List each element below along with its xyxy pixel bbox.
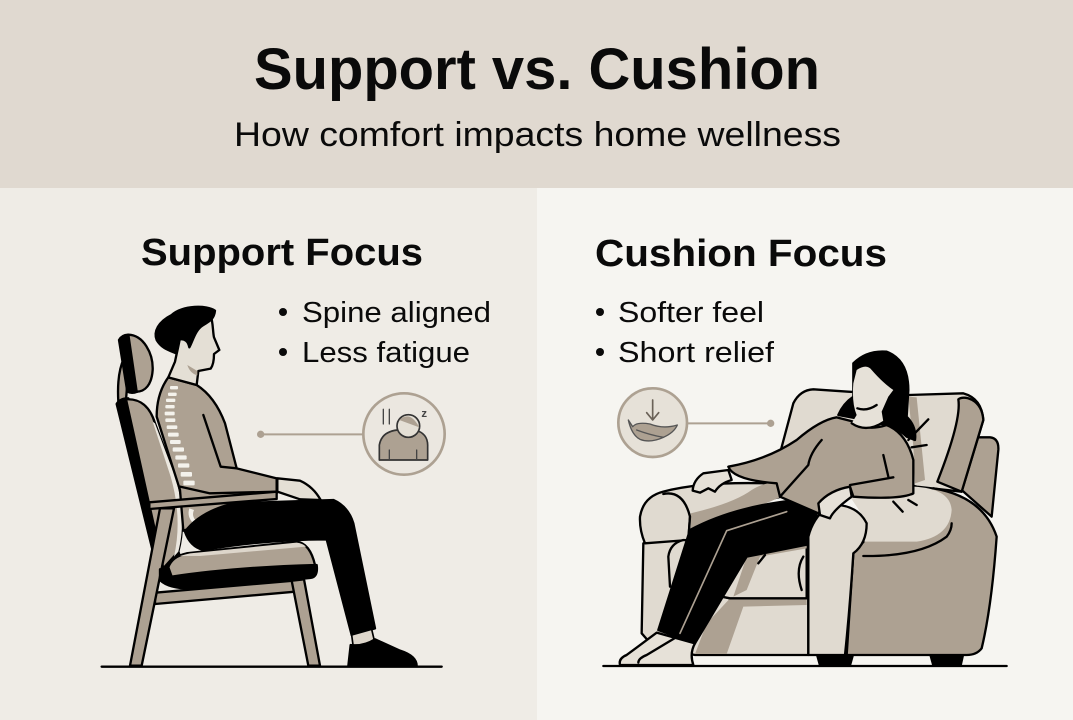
illustration: man seated in supportive chair — [102, 307, 445, 667]
armchair rear wing — [960, 437, 998, 517]
hand — [277, 478, 321, 500]
armrest — [149, 492, 277, 509]
leg — [185, 500, 375, 635]
torso — [157, 377, 277, 531]
floor line — [603, 662, 1007, 669]
heading: cushion focus: Cushion Focus — [595, 233, 887, 275]
heading: support focus: Support Focus — [141, 232, 423, 274]
list: support benefits: Spine aligned — [302, 297, 491, 329]
front armrest — [808, 505, 867, 655]
chair seat — [160, 542, 317, 589]
list: support benefits — [279, 297, 491, 369]
spine — [165, 386, 196, 523]
arm detail — [180, 415, 277, 493]
illustration: woman relaxing in soft armchair — [603, 351, 1007, 666]
list: cushion effects — [596, 297, 775, 369]
head — [156, 307, 219, 385]
connector — [687, 420, 774, 426]
hair — [838, 351, 915, 440]
armchair body — [847, 488, 997, 655]
icon: feather — [618, 388, 687, 457]
icon: tired person — [363, 393, 445, 475]
list: support benefits: Less fatigue — [302, 337, 470, 369]
title: Support vs. Cushion — [254, 37, 820, 102]
torso — [728, 417, 913, 513]
foot — [348, 629, 417, 666]
icon: tired person: z — [421, 408, 427, 420]
hands — [693, 470, 852, 518]
armchair backrest — [780, 389, 983, 492]
feet — [620, 633, 695, 665]
left armrest and chair base — [640, 483, 808, 655]
legs — [658, 500, 817, 643]
chair headrest — [118, 335, 153, 402]
list: cushion effects: Softer feel — [618, 297, 764, 329]
list: cushion effects: Short relief — [618, 337, 775, 369]
panel: right background — [537, 188, 1073, 720]
armchair feet — [817, 653, 963, 665]
arm details — [780, 440, 893, 497]
panel: left background — [0, 188, 537, 720]
seat cushion — [850, 487, 952, 556]
connector — [258, 431, 363, 437]
chair back — [117, 398, 182, 580]
face and neck — [852, 367, 893, 428]
floor line — [102, 663, 442, 670]
subtitle: How comfort impacts home wellness — [234, 116, 841, 154]
header band — [0, 0, 1073, 188]
chair frame — [130, 508, 320, 666]
